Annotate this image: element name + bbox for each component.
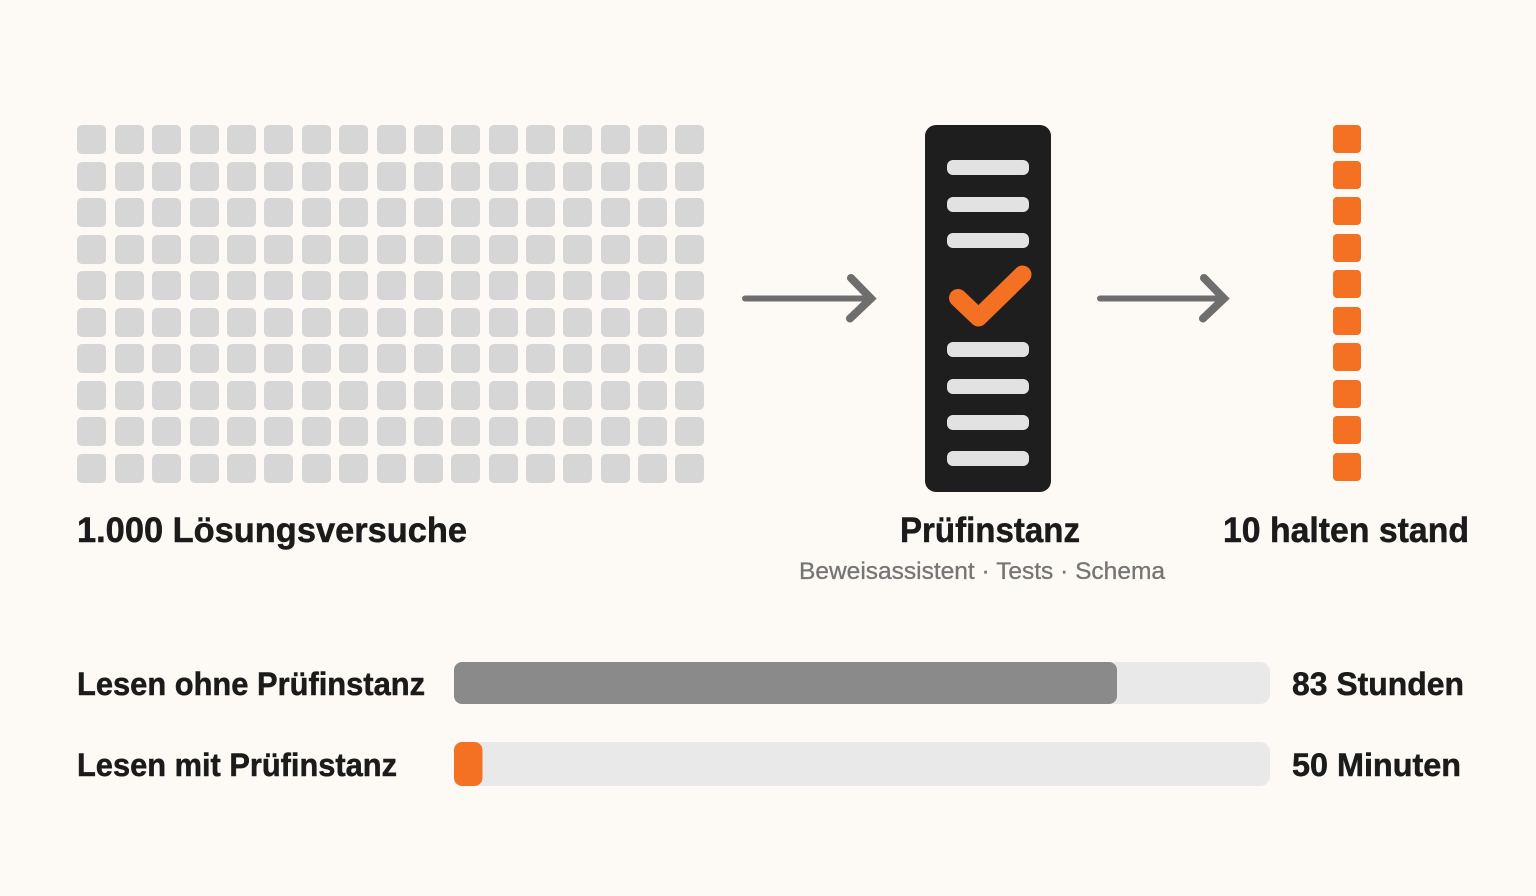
row: reading without verifier (77, 662, 1464, 704)
label: verifier: Prüfinstanz (900, 511, 1080, 550)
arrow: attempts to verifier (745, 278, 871, 318)
row value: 83 Stunden (1292, 666, 1464, 702)
icon: verifier panel (925, 125, 1051, 492)
row value: 50 Minuten (1292, 747, 1461, 783)
row: reading with verifier (77, 742, 1461, 786)
arrow: verifier to survivors (1100, 278, 1224, 318)
icon: orange check mark (958, 274, 1022, 318)
checklist lines (947, 160, 1029, 466)
label: verifier subtitle: Beweisassistent · Tests · Schema (799, 558, 1166, 585)
bar fill (454, 662, 1117, 704)
grid: 1000 solution attempts (77, 125, 704, 483)
row label: Lesen mit Prüfinstanz (77, 747, 397, 783)
bar track (454, 662, 1270, 704)
column: 10 surviving attempts (1333, 125, 1361, 481)
bar fill (454, 742, 482, 786)
label: 10 survive: 10 halten stand (1223, 511, 1469, 550)
bar track (454, 742, 1270, 786)
label: 1000 attempts: 1.000 Lösungsversuche (77, 511, 467, 550)
row label: Lesen ohne Prüfinstanz (77, 666, 425, 702)
